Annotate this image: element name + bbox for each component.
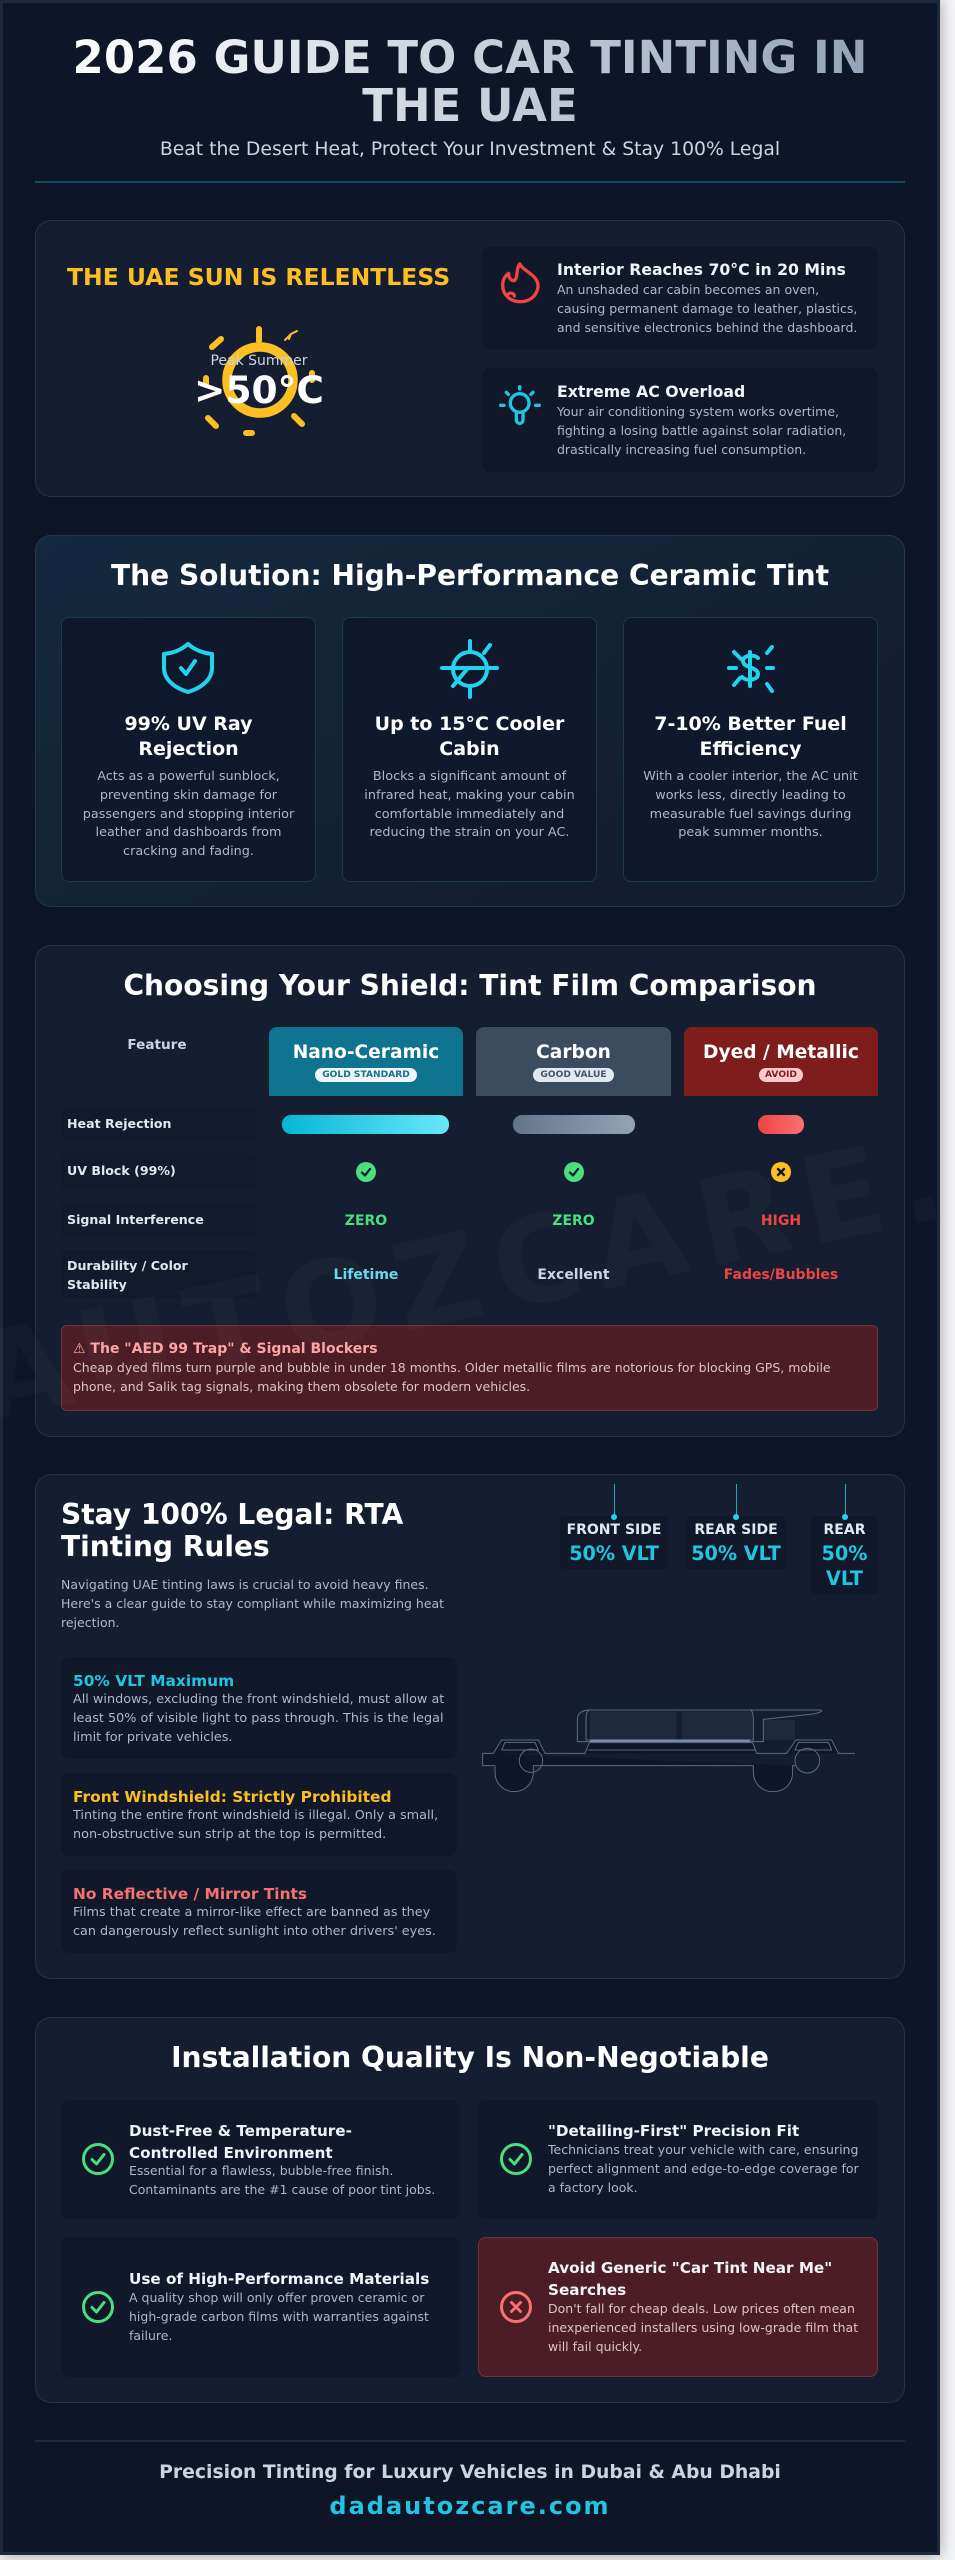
card: avoid generic searches (478, 2237, 878, 2377)
card: cooler cabin: Cabin (439, 738, 500, 760)
rule: 50% VLT: least 50% of visible light to pass through. This is the legal (73, 1711, 444, 1726)
card: interior heat: An unshaded car cabin becomes an oven, (557, 282, 819, 297)
card: AC overload: Your air conditioning system works overtime, (557, 404, 839, 419)
card: high performance materials: A quality shop will only offer proven ceramic or (129, 2290, 424, 2305)
callout: rear side VLT: 50% VLT (691, 1542, 781, 1565)
title: THE UAE (362, 78, 578, 132)
card: detailing first: perfect alignment and edge-to-edge coverage for (548, 2161, 859, 2176)
card: interior heat (482, 247, 878, 349)
heading: stay legal: Tinting Rules (61, 1530, 270, 1563)
callout: front side VLT: 50% VLT (569, 1542, 659, 1565)
table header: feature: Feature (127, 1037, 187, 1053)
panel: installation quality (35, 2017, 905, 2403)
card: interior heat: causing permanent damage to leather, plastics, (557, 301, 857, 316)
icon: cross (771, 1162, 791, 1182)
card: detailing first (478, 2100, 878, 2219)
row: UV block (67, 1162, 791, 1182)
card: avoid generic searches: inexperienced installers using low-grade film that (548, 2320, 858, 2335)
panel: tint film comparison (35, 945, 905, 1437)
rule: front windshield: Tinting the entire front windshield is illegal. Only a small, (73, 1808, 438, 1823)
illustration: car outline (482, 1710, 855, 1792)
card: fuel efficiency (623, 617, 878, 882)
icon: light bulb (499, 385, 541, 426)
title: 2026 GUIDE TO CAR TINTING IN (73, 31, 867, 84)
card: fuel efficiency: 7-10% Better Fuel (654, 713, 847, 735)
icon: flame (501, 262, 540, 304)
row: durability: Excellent (537, 1267, 610, 1283)
footer URL: dadautozcare.com (329, 2492, 611, 2520)
card: dust free: Controlled Environment (129, 2144, 333, 2162)
heading: stay legal: Stay 100% Legal: RTA (61, 1498, 403, 1531)
icon: dollar burst (727, 644, 775, 694)
row: durability (67, 1258, 838, 1292)
card: interior heat: Interior Reaches 70°C in 20 Mins (557, 260, 846, 279)
card: fuel efficiency: With a cooler interior, the AC unit (643, 769, 858, 784)
callout: rear VLT: REAR (824, 1522, 865, 1538)
card: UV rejection: preventing skin damage for (100, 788, 277, 803)
card: high performance materials: high-grade carbon films with warranties against (129, 2309, 429, 2324)
row: signal interference: Signal Interference (67, 1212, 204, 1227)
column header: dyed metallic: AVOID (765, 1070, 797, 1080)
rule: front windshield: non-obstructive sun strip at the top is permitted. (73, 1827, 386, 1842)
callout: AED 99 trap (61, 1325, 878, 1411)
bar: dyed (758, 1115, 804, 1134)
column header: nano-ceramic: Nano-Ceramic (293, 1042, 439, 1063)
heading: comparison: Choosing Your Shield: Tint Film Comparison (123, 969, 817, 1002)
card: high performance materials (61, 2237, 460, 2377)
intro text: rejection. (61, 1615, 120, 1630)
callout: AED 99 trap: Cheap dyed films turn purple and bubble in under 18 months. Older metallic films are notorious for blocking GPS, mobile (73, 1360, 831, 1375)
card: avoid generic searches: Don't fall for cheap deals. Low prices often mean (548, 2301, 855, 2316)
column header: carbon: GOOD VALUE (540, 1070, 607, 1080)
intro text: Here's a clear guide to stay compliant while maximizing heat (61, 1596, 444, 1611)
callout: rear VLT: VLT (826, 1566, 863, 1590)
icon: check (564, 1162, 584, 1182)
panel: RTA legal rules (35, 1474, 905, 1979)
icon: check circle (82, 2291, 114, 2323)
icon: sun with temperature: >50°C (194, 368, 324, 412)
card: dust free (61, 2100, 460, 2219)
intro text (61, 1577, 444, 1630)
intro text: Navigating UAE tinting laws is crucial to avoid heavy fines. (61, 1577, 429, 1592)
row: UV block: UV Block (99%) (67, 1163, 176, 1178)
card: AC overload: fighting a losing battle against solar radiation, (557, 423, 846, 438)
card: cooler cabin: infrared heat, making your cabin (364, 788, 575, 803)
card: AC overload (482, 368, 878, 472)
row: signal interference: ZERO (552, 1213, 595, 1229)
rule: no reflective: can dangerously reflect sunlight into other drivers' eyes. (73, 1924, 436, 1939)
row: signal interference (67, 1212, 801, 1229)
card: cooler cabin: comfortable immediately and (375, 807, 564, 822)
card: UV rejection: Acts as a powerful sunblock, (97, 769, 280, 784)
column header: dyed metallic (684, 1027, 878, 1096)
icon: cross circle (500, 2291, 532, 2323)
card: dust free: Contaminants are the #1 cause of poor tint jobs. (129, 2182, 435, 2197)
card: UV rejection: 99% UV Ray (124, 713, 253, 735)
icon: sun with temperature: Peak Summer (210, 353, 308, 369)
column header: carbon (476, 1027, 671, 1096)
rule: 50% VLT: limit for private vehicles. (73, 1730, 233, 1745)
card: dust free: Dust-Free & Temperature- (129, 2122, 352, 2140)
card: cooler cabin: reducing the strain on your AC. (370, 825, 569, 840)
card: fuel efficiency: Efficiency (699, 738, 802, 760)
panel: UAE sun (35, 220, 905, 497)
rule: no reflective (61, 1870, 457, 1953)
card: interior heat: and sensitive electronics behind the dashboard. (557, 320, 857, 335)
callout: front side VLT (567, 1484, 661, 1565)
card: UV rejection (61, 617, 316, 882)
heading: the UAE sun is relentless: THE UAE SUN IS RELENTLESS (67, 263, 450, 291)
bar: carbon (513, 1115, 635, 1134)
rule: 50% VLT: 50% VLT Maximum (73, 1672, 234, 1690)
callout: rear VLT: 50% (822, 1542, 867, 1565)
card: fuel efficiency: measurable fuel savings during (650, 807, 851, 822)
card: detailing first: "Detailing-First" Precision Fit (548, 2122, 799, 2140)
callout: rear VLT (822, 1484, 867, 1590)
card: avoid generic searches: Avoid Generic "Car Tint Near Me" (548, 2259, 832, 2277)
column header: nano-ceramic (269, 1027, 463, 1096)
row: durability: Durability / Color (67, 1258, 188, 1273)
card: fuel efficiency: works less, directly leading to (655, 788, 846, 803)
rule: no reflective: No Reflective / Mirror Tints (73, 1885, 307, 1903)
row: durability: Fades/Bubbles (724, 1267, 838, 1283)
card: UV rejection: leather and dashboards from (96, 825, 281, 840)
card: high performance materials: failure. (129, 2328, 172, 2343)
card: avoid generic searches: Searches (548, 2281, 626, 2299)
row: signal interference: HIGH (761, 1213, 801, 1229)
rule: 50% VLT (61, 1657, 457, 1759)
rule: 50% VLT: All windows, excluding the front windshield, must allow at (73, 1692, 444, 1707)
card: high performance materials: Use of High-Performance Materials (129, 2270, 429, 2288)
footer tagline: Precision Tinting for Luxury Vehicles in Dubai & Abu Dhabi (159, 2462, 781, 2483)
callout: rear side VLT (691, 1484, 781, 1565)
row: heat rejection (67, 1115, 804, 1134)
card: UV rejection: passengers and stopping interior (83, 807, 294, 822)
icon: sun with temperature (194, 326, 324, 436)
row: signal interference: ZERO (345, 1213, 387, 1229)
column header: dyed metallic: Dyed / Metallic (703, 1042, 859, 1063)
subtitle: Beat the Desert Heat, Protect Your Investment & Stay 100% Legal (160, 139, 780, 160)
card: cooler cabin (342, 617, 597, 882)
bar: nano-ceramic (282, 1115, 449, 1134)
card: cooler cabin: Up to 15°C Cooler (375, 713, 564, 735)
card: UV rejection: cracking and fading. (123, 844, 254, 859)
row: durability: Stability (67, 1277, 127, 1292)
icon: shield (162, 642, 214, 694)
callout: front side VLT: FRONT SIDE (567, 1522, 661, 1538)
column header: nano-ceramic: GOLD STANDARD (322, 1070, 410, 1080)
callout: AED 99 trap: phone, and Salik tag signals, making them obsolete for modern vehicles. (73, 1379, 530, 1394)
card: AC overload: Extreme AC Overload (557, 382, 745, 401)
row: durability: Lifetime (334, 1267, 398, 1283)
callout: rear side VLT: REAR SIDE (694, 1522, 778, 1538)
heading: installation quality: Installation Quality Is Non-Negotiable (171, 2041, 769, 2074)
row: heat rejection: Heat Rejection (67, 1116, 172, 1131)
icon: check circle (82, 2143, 114, 2175)
card: fuel efficiency: peak summer months. (678, 825, 823, 840)
card: detailing first: Technicians treat your vehicle with care, ensuring (548, 2142, 858, 2157)
heading: the solution: The Solution: High-Performance Ceramic Tint (111, 559, 829, 592)
card: AC overload: drastically increasing fuel consumption. (557, 442, 806, 457)
column header: carbon: Carbon (536, 1042, 611, 1063)
heading: stay legal (61, 1498, 404, 1563)
icon: sun with heat block (440, 639, 499, 699)
card: avoid generic searches: will fail quickly. (548, 2339, 642, 2354)
card: detailing first: a factory look. (548, 2180, 638, 2195)
rule: no reflective: Films that create a mirror-like effect are banned as they (73, 1905, 430, 1920)
rule: front windshield (61, 1773, 457, 1856)
icon: check circle (500, 2143, 532, 2175)
callout: AED 99 trap: ⚠ The "AED 99 Trap" & Signal Blockers (73, 1341, 378, 1357)
card: cooler cabin: Blocks a significant amount of (373, 769, 566, 784)
card: UV rejection: Rejection (138, 738, 239, 760)
card: dust free: Essential for a flawless, bubble-free finish. (129, 2163, 393, 2178)
title (73, 31, 867, 132)
panel: the solution (35, 535, 905, 907)
icon: check (356, 1162, 376, 1182)
rule: front windshield: Front Windshield: Strictly Prohibited (73, 1788, 391, 1806)
